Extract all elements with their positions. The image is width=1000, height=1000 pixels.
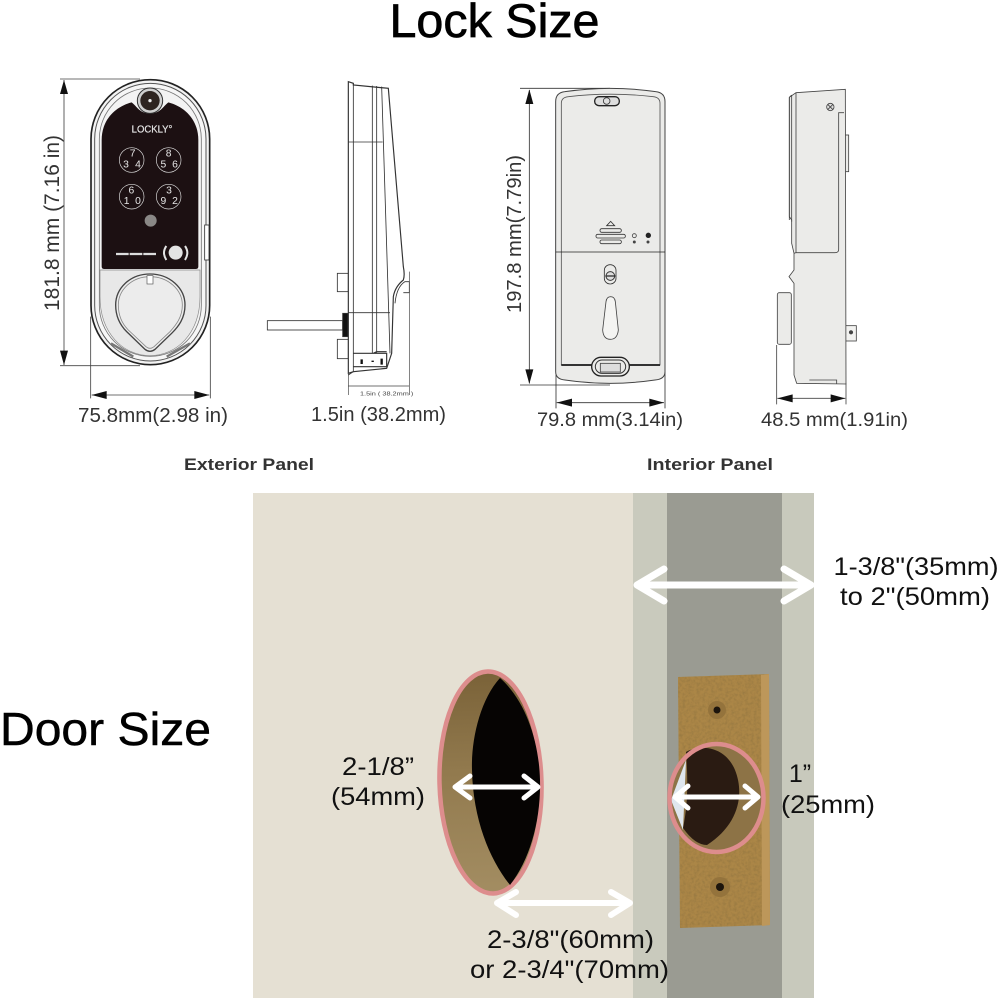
dimension label: 181.8 mm: 181.8 mm (7.16 in): [41, 135, 64, 311]
bottom grip: [561, 357, 660, 376]
door label: thickness: 1-3/8"(35mm): [834, 553, 998, 581]
camera: [137, 88, 163, 113]
keypad: 5: [160, 159, 166, 170]
door label: latch bore: (25mm): [781, 791, 875, 819]
exterior panel front view: [60, 79, 210, 399]
fingerprint sensor: [145, 215, 157, 227]
doorbell button: [164, 246, 187, 260]
keypad: 4: [135, 159, 141, 170]
height dimension lines: [60, 79, 140, 366]
mounting bolts and tailpiece: [267, 273, 348, 359]
knob and tab: [777, 135, 856, 344]
bottom vents: [111, 343, 190, 357]
cross bore hole: [437, 670, 544, 895]
keypad: 3: [166, 185, 172, 196]
width dimension: 1.5in ( 38.2mm ): [360, 391, 413, 397]
interior panel front view: [520, 88, 665, 408]
door label: cross bore: (54mm): [331, 783, 425, 811]
thumb switch: [604, 265, 616, 284]
keypad: 0: [135, 196, 141, 207]
door label: backset: or 2-3/4"(70mm): [470, 956, 669, 984]
door label: thickness: to 2"(50mm): [840, 583, 990, 611]
cover body: [556, 88, 665, 383]
keypad: 6: [128, 185, 134, 196]
heart knob: [116, 274, 185, 351]
keypad: 8: [166, 149, 172, 160]
caption: Exterior Panel: Exterior Panel: [184, 455, 314, 474]
width dimension lines: [91, 317, 210, 399]
top latch: [595, 97, 619, 106]
caption: Interior Panel: Interior Panel: [647, 455, 773, 474]
door edge: [633, 493, 667, 998]
door label: thickness: [834, 553, 998, 611]
inner contours: [348, 83, 409, 375]
side outline: [789, 89, 846, 384]
door photo: [253, 493, 814, 998]
interior panel side view: [777, 89, 856, 404]
keypad: 6: [172, 159, 178, 170]
brand logo: LOCKLY°: [132, 124, 172, 135]
strike plate mortise: [670, 674, 770, 928]
screw: [827, 103, 834, 111]
width dimension lines: [556, 370, 665, 408]
door label: backset: 2-3/8"(60mm): [487, 926, 654, 954]
door label: latch bore: [781, 760, 875, 819]
dimension label: 79.8 mm: 79.8 mm(3.14in): [537, 410, 683, 431]
dimension label: 1.5in: 1.5in (38.2mm): [311, 404, 446, 426]
lower metal panel: [100, 270, 200, 356]
battery contacts: [353, 352, 387, 367]
height dimension lines: [520, 88, 610, 385]
arrow: cross bore diameter: [455, 776, 538, 798]
keypad: 3: [123, 159, 129, 170]
battery detail marks: [362, 359, 382, 365]
door label: latch bore: 1”: [789, 760, 811, 788]
width dimension: [777, 345, 846, 404]
door face: [253, 493, 634, 998]
keypad: 1: [124, 196, 130, 207]
battery cover divider: [556, 251, 665, 253]
door label: backset: [470, 926, 669, 984]
title: Door Size: Door Size: [0, 703, 211, 755]
lock body: [91, 80, 210, 365]
arrow: door thickness: [637, 569, 811, 601]
dimension label: 197.8 mm: 197.8 mm(7.79in): [504, 155, 526, 313]
indicators: [632, 233, 651, 243]
width dimension: [348, 272, 413, 397]
cover contours: [789, 93, 844, 384]
arrow: backset: [497, 892, 630, 915]
latch hole: [670, 744, 764, 852]
status bars: [116, 250, 156, 257]
door label: cross bore: [331, 753, 425, 811]
dimension label: 48.5 mm: 48.5 mm(1.91in): [761, 410, 908, 431]
battery vent: [596, 221, 625, 244]
keypad: 7: [130, 149, 136, 160]
keypad: [119, 148, 181, 209]
side latch: [205, 225, 209, 260]
dimension label: 75.8mm: 75.8mm(2.98 in): [78, 405, 228, 427]
black touch screen: [102, 102, 198, 269]
key slot: [603, 297, 618, 339]
side outline: [348, 82, 404, 373]
keypad: 9: [160, 196, 166, 207]
door label: cross bore: 2-1/8”: [342, 753, 414, 781]
arrow: latch bore diameter: [675, 786, 758, 808]
keypad: 2: [172, 196, 178, 207]
exterior panel side view: [267, 82, 413, 397]
